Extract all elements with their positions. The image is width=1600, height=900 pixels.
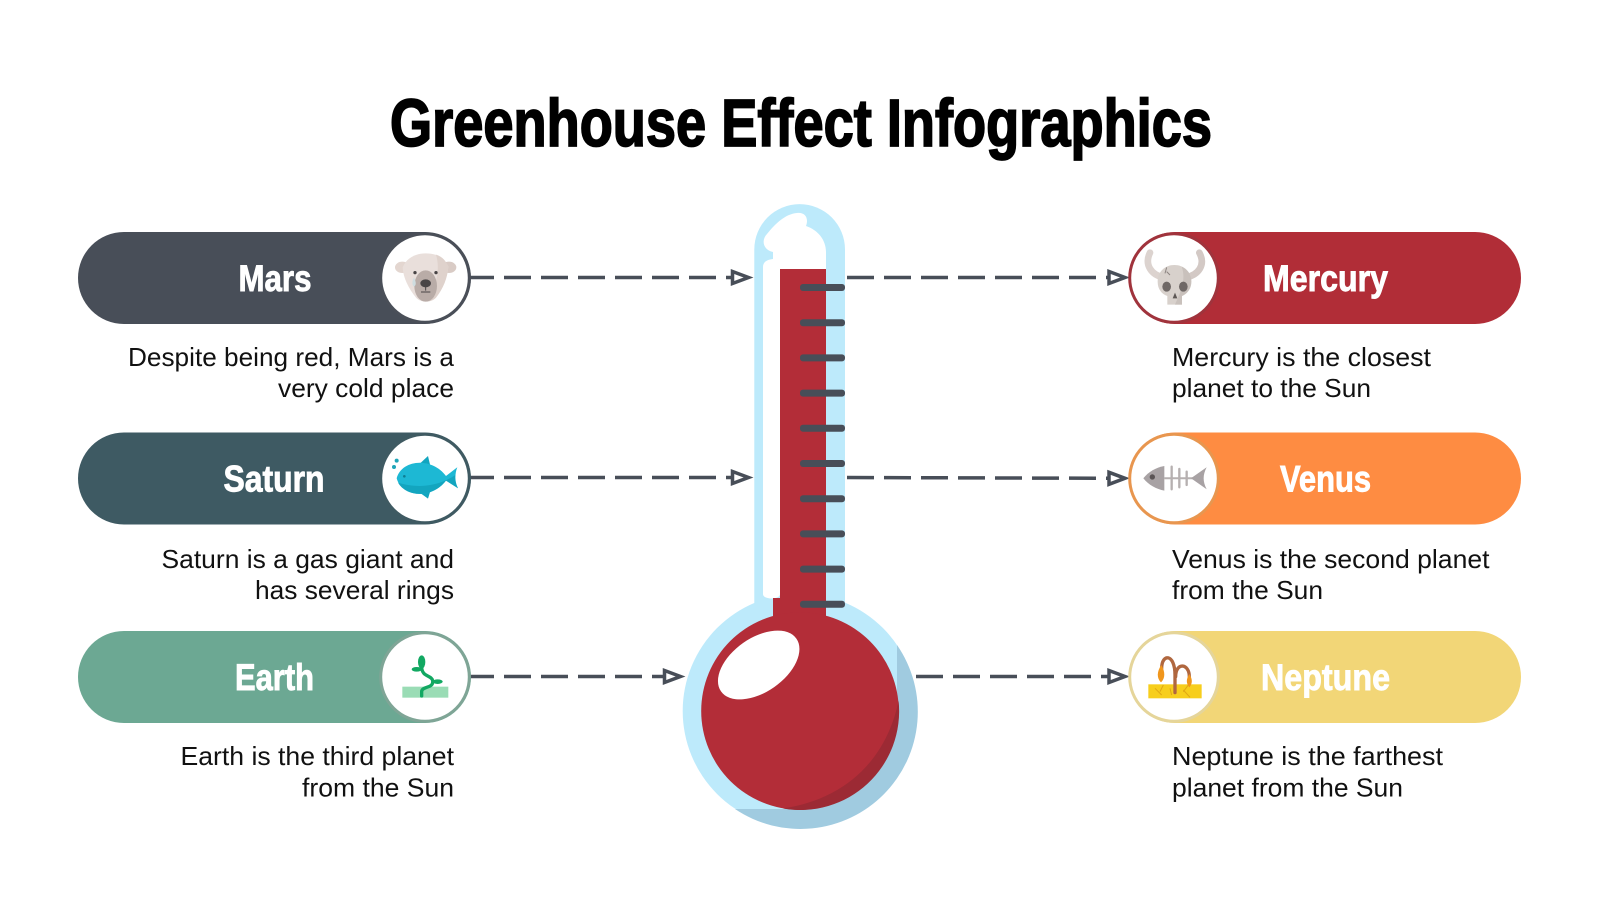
arrow: Mars to thermometer — [467, 272, 748, 284]
text: Mercury description: Mercury is the closest — [1172, 342, 1432, 372]
mercury column — [773, 269, 826, 620]
arrow: thermometer to Mercury — [847, 272, 1125, 284]
text: Earth description: from the Sun — [302, 772, 454, 802]
arrow: thermometer to Venus — [847, 472, 1125, 484]
thermometer glass — [754, 204, 845, 620]
pill: Mars — [78, 232, 471, 324]
panel: Venus — [1129, 432, 1521, 605]
icon: fish — [381, 434, 469, 523]
text: Mars description — [128, 342, 455, 403]
panel: Earth — [78, 631, 471, 802]
text: Earth description — [180, 741, 455, 802]
text: Mars description: very cold place — [278, 373, 454, 403]
text: Neptune description — [1172, 741, 1444, 802]
icon: fish bone — [1130, 434, 1218, 523]
panel: Mercury — [1129, 232, 1521, 403]
icon: polar bear — [381, 234, 469, 322]
scale ticks — [800, 284, 845, 608]
icon: skull — [1130, 234, 1218, 322]
text: Earth description: Earth is the third planet — [180, 741, 455, 771]
text: Neptune description: planet from the Sun — [1172, 772, 1403, 802]
text: Saturn description — [162, 544, 454, 605]
thermometer — [683, 204, 918, 829]
heading: Mars: Mars — [238, 258, 312, 299]
mercury bulb — [701, 612, 899, 810]
text: Neptune description: Neptune is the farthest — [1172, 741, 1444, 771]
bulb highlight — [706, 616, 812, 714]
thermometer bulb glass — [683, 594, 917, 828]
icon: dried plant — [1130, 633, 1218, 721]
text: Venus description: Venus is the second planet — [1172, 544, 1490, 574]
pill: Saturn — [78, 432, 471, 524]
title: Greenhouse Effect Infographics — [390, 86, 1212, 161]
text: Mercury description — [1172, 342, 1432, 403]
heading: Venus: Venus — [1280, 458, 1371, 500]
panel: Mars — [78, 232, 471, 403]
arrow: thermometer to Neptune — [916, 670, 1125, 682]
pill: Mercury — [1129, 232, 1521, 324]
arrow: Saturn to thermometer — [467, 472, 748, 484]
text: Saturn description: has several rings — [255, 575, 454, 605]
arrow: Earth to thermometer — [467, 670, 680, 682]
text: Venus description — [1172, 544, 1490, 605]
heading: Mercury: Mercury — [1263, 258, 1388, 299]
icon: sprout — [381, 633, 469, 721]
panel: Saturn — [78, 432, 471, 605]
bulb shadow — [735, 645, 918, 829]
heading: Earth: Earth — [235, 657, 314, 698]
text: Mercury description: planet to the Sun — [1172, 373, 1371, 403]
bulb inner shadow — [783, 701, 899, 810]
heading: Neptune: Neptune — [1261, 657, 1390, 698]
pill: Neptune — [1129, 631, 1521, 723]
text: Venus description: from the Sun — [1172, 575, 1323, 605]
text: Mars description: Despite being red, Mars is a — [128, 342, 455, 372]
text: Saturn description: Saturn is a gas giant and — [162, 544, 454, 574]
pill: Earth — [78, 631, 471, 723]
panel: Neptune — [1129, 631, 1521, 802]
heading: Saturn: Saturn — [224, 458, 324, 500]
pill: Venus — [1129, 432, 1521, 524]
glass highlight — [763, 213, 826, 598]
